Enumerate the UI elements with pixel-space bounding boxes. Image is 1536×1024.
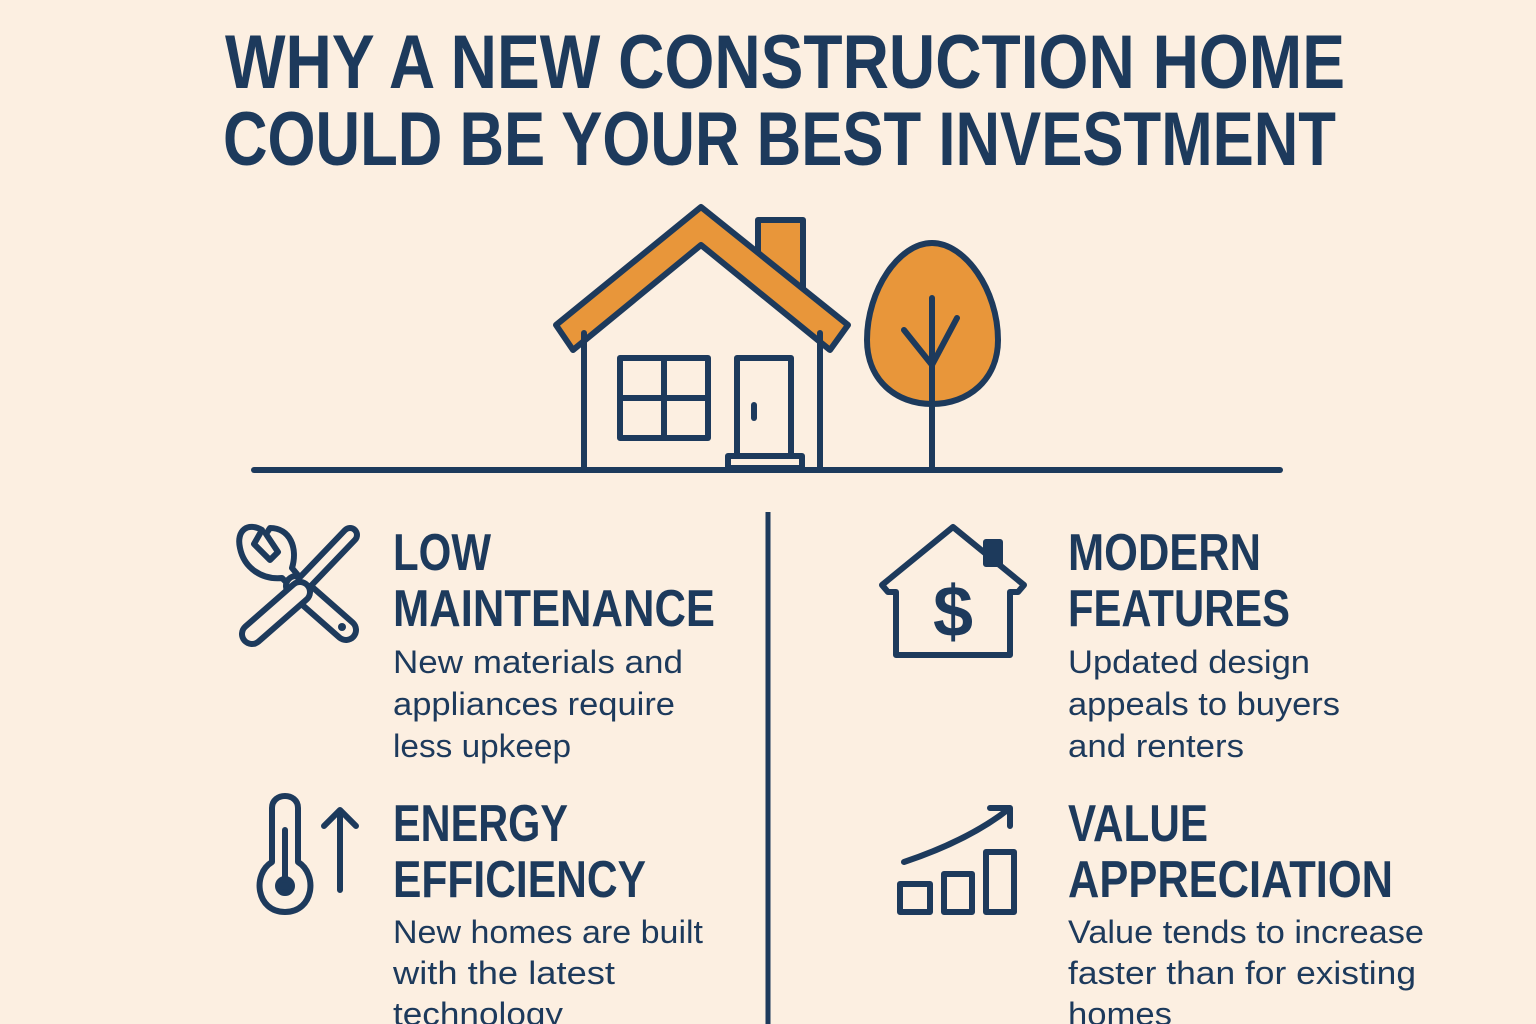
title: WHY A NEW CONSTRUCTION HOME (225, 20, 1345, 105)
modern features: FEATURES (1068, 580, 1290, 638)
value appreciation (1068, 795, 1424, 1024)
energy efficiency: with the latest (392, 955, 615, 991)
modern features: Updated design (1068, 644, 1310, 680)
wrench handle (296, 586, 346, 630)
screwdriver handle (252, 592, 300, 634)
modern features: and renters (1068, 728, 1244, 764)
modern features: MODERN (1068, 524, 1261, 582)
section texts (392, 524, 1424, 1024)
value appreciation: APPRECIATION (1068, 851, 1393, 909)
screwdriver shaft (305, 535, 350, 582)
icon: house with dollar (882, 527, 1024, 655)
value appreciation: Value tends to increase (1068, 914, 1424, 950)
illustration: house and tree (254, 207, 1280, 470)
low maintenance: LOW (393, 524, 492, 582)
low maintenance: New materials and (393, 644, 683, 680)
title (223, 20, 1345, 182)
energy efficiency: EFFICIENCY (393, 851, 646, 909)
wrench head (239, 527, 302, 588)
icon: thermometer with arrow (260, 796, 356, 912)
icon: wrench and screwdriver (239, 527, 350, 634)
modern features (1068, 524, 1340, 764)
value appreciation: VALUE (1068, 795, 1208, 853)
modern features: appeals to buyers (1068, 686, 1340, 722)
energy efficiency: New homes are built (393, 914, 703, 950)
low maintenance (393, 524, 715, 764)
divider (766, 512, 770, 1024)
icon: house with dollar: $ (933, 572, 973, 652)
energy efficiency: ENERGY (393, 795, 568, 853)
low maintenance: less upkeep (393, 728, 571, 764)
energy efficiency (392, 795, 703, 1024)
low maintenance: appliances require (393, 686, 675, 722)
icon: growth chart (900, 808, 1014, 912)
low maintenance: MAINTENANCE (393, 580, 715, 638)
value appreciation: faster than for existing (1068, 955, 1416, 991)
